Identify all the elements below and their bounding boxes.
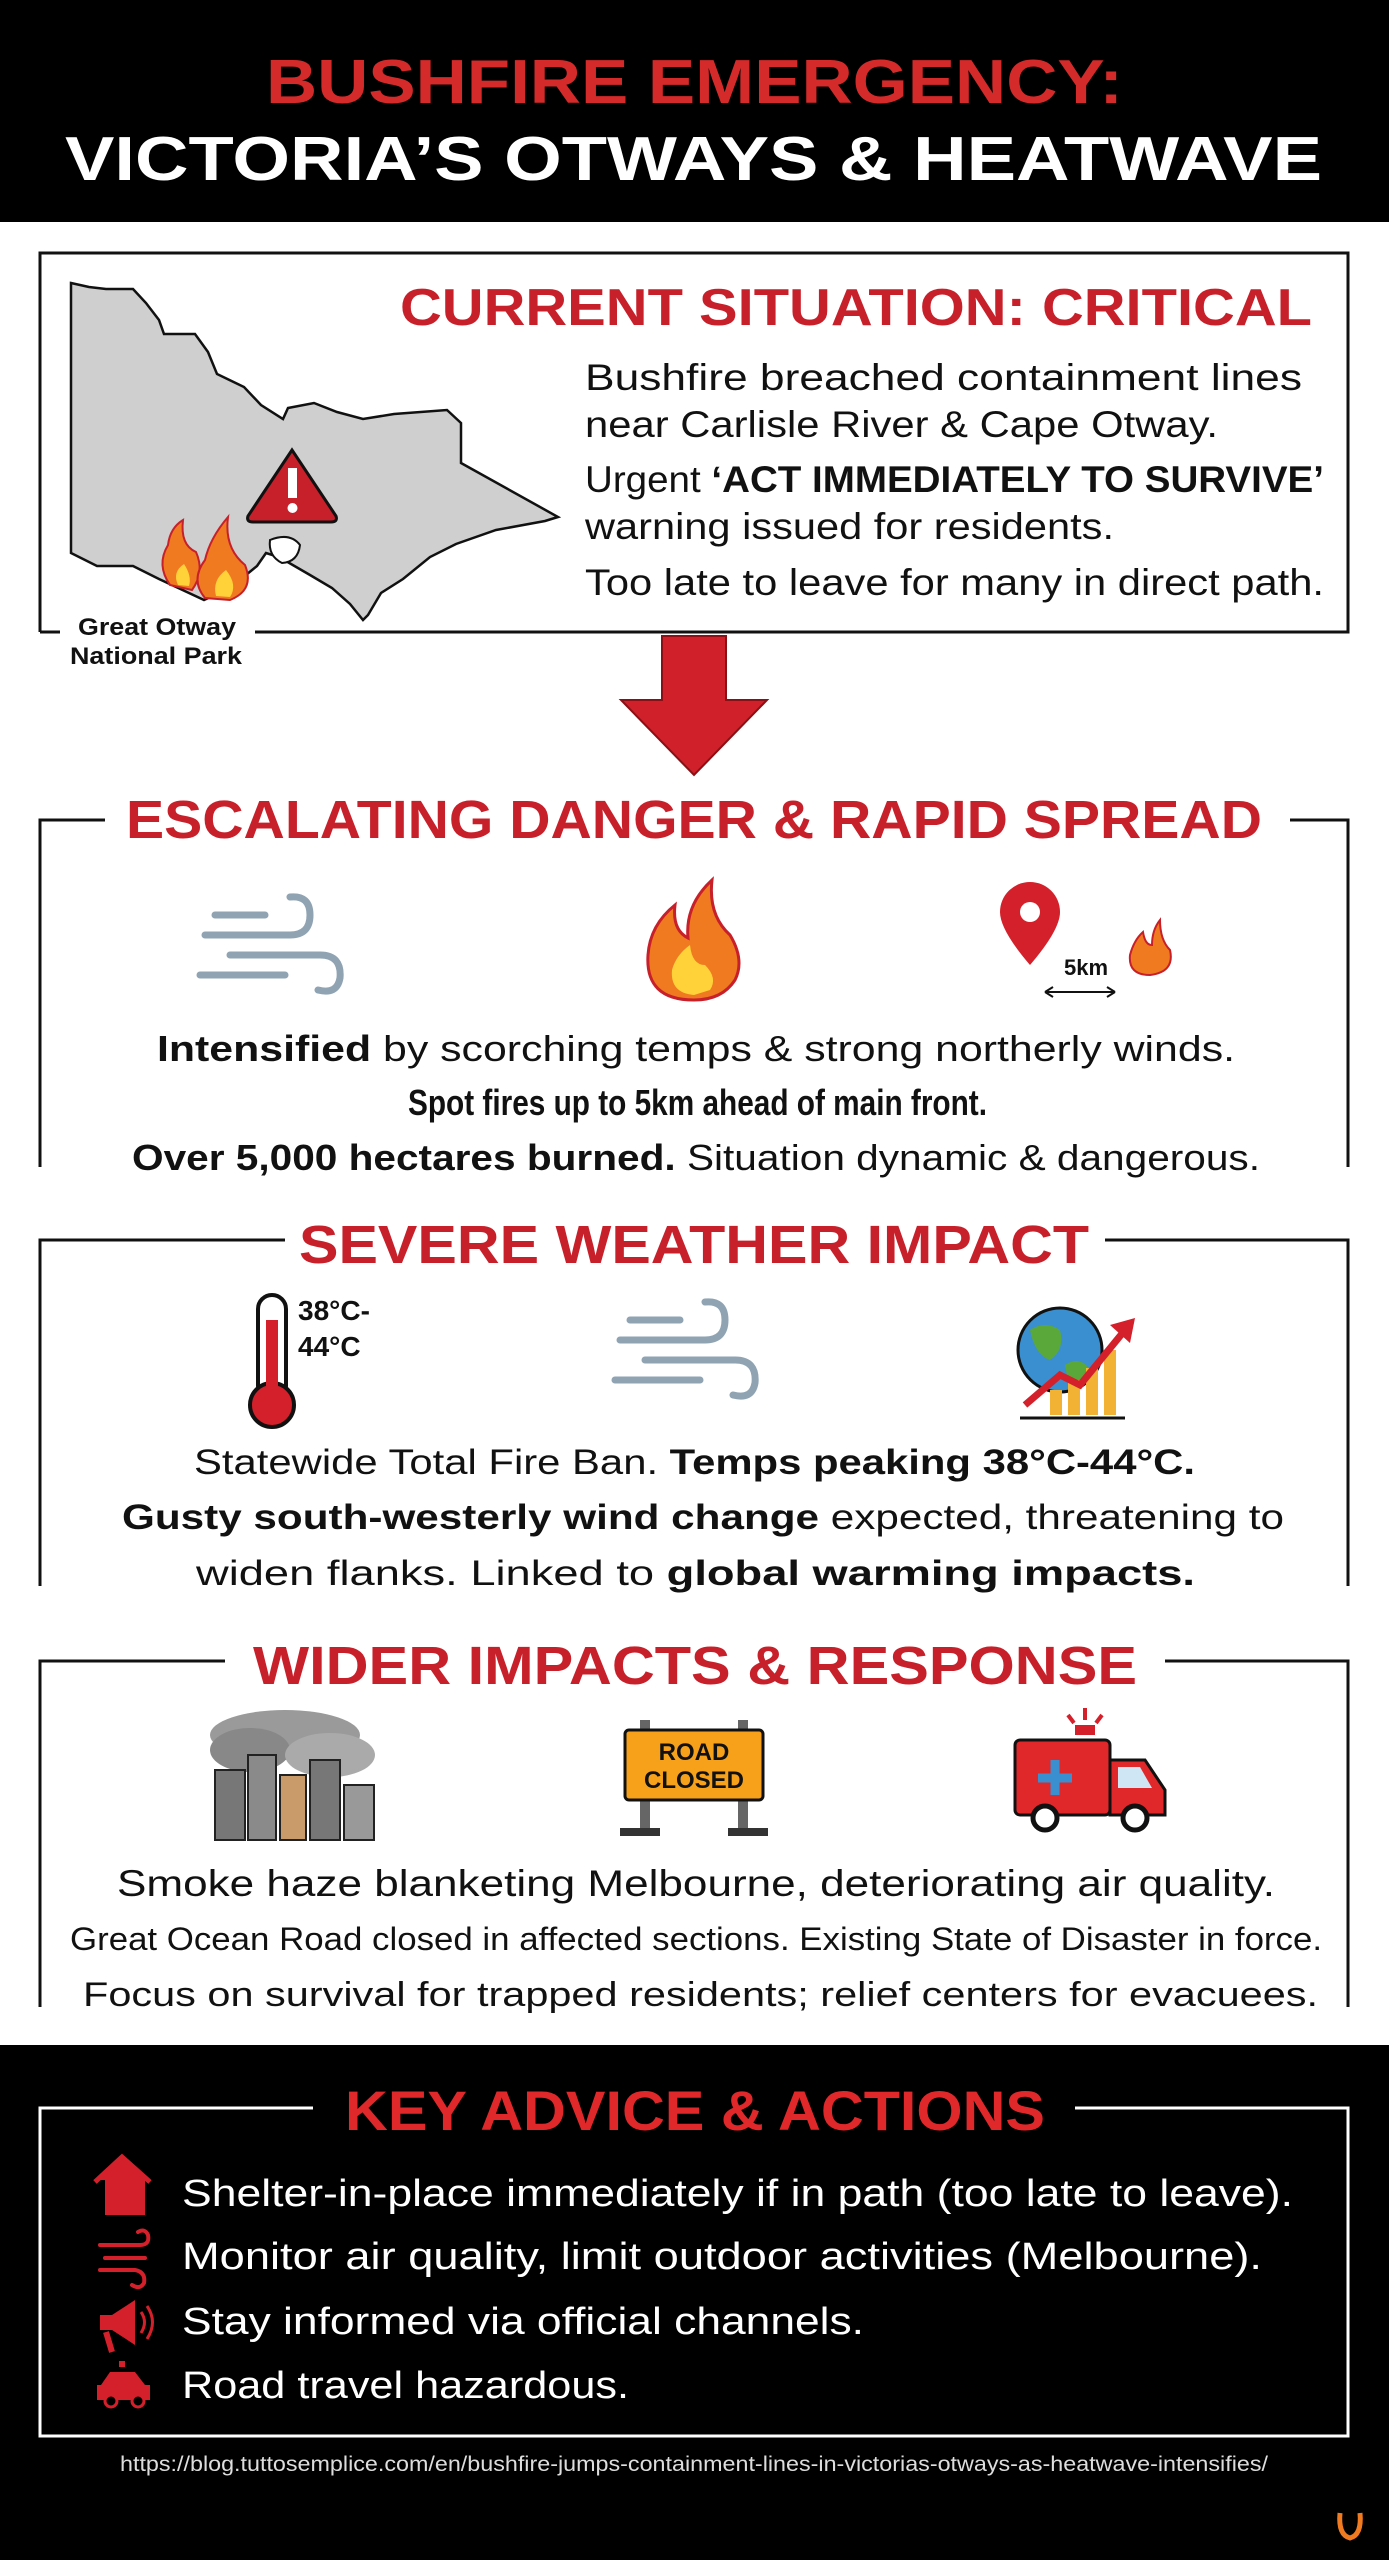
icon: car	[97, 2361, 150, 2407]
icon: thermometer: 44°C	[298, 1331, 361, 1362]
text block: situation	[584, 357, 1324, 603]
panel: escalating danger	[40, 790, 1348, 1178]
title: VICTORIA’S OTWAYS & HEATWAVE	[65, 125, 1322, 194]
icon: house	[95, 2157, 150, 2215]
icon: fire truck	[1015, 1708, 1165, 1830]
heading: severe weather: SEVERE WEATHER IMPACT	[299, 1215, 1089, 1275]
text block: impacts	[70, 1863, 1322, 2014]
icon: thermometer: 38°C-	[298, 1295, 370, 1326]
label: Great Otway National Park: National Park	[70, 643, 243, 670]
icon: location pin 5km	[1000, 882, 1171, 997]
arrow: down	[621, 636, 767, 775]
panel: current situation	[40, 253, 1348, 670]
label: Great Otway National Park: Great Otway	[78, 614, 237, 641]
text block: situation: Urgent ‘ACT IMMEDIATELY TO SURVIVE’	[585, 459, 1324, 500]
text block: impacts: Focus on survival for trapped residents; relief centers for evacuees.	[83, 1976, 1318, 2014]
text block: escalating	[132, 1028, 1260, 1178]
title	[65, 48, 1322, 194]
list: advice items	[182, 2173, 1293, 2407]
icon: wind	[200, 897, 340, 991]
source url: https://blog.tuttosemplice.com/en/bushfire-jumps-containment-lines-in-victorias-otways-as-heatwave-intensifies/	[120, 2453, 1268, 2476]
panel: wider impacts	[40, 1636, 1348, 2014]
panel: key advice	[0, 2045, 1389, 2560]
icon: location pin 5km: 5km	[1064, 955, 1108, 980]
heading: key advice: KEY ADVICE & ACTIONS	[345, 2079, 1045, 2142]
icon: wind	[100, 2231, 148, 2287]
map of Victoria	[71, 283, 558, 620]
heading: escalating: ESCALATING DANGER & RAPID SPREAD	[126, 790, 1262, 850]
icon: megaphone	[100, 2300, 152, 2352]
text block: weather: widen flanks. Linked to global warming impacts.	[195, 1554, 1195, 1593]
text block: weather	[122, 1443, 1284, 1593]
text block: escalating: Spot fires up to 5km ahead of main front.	[408, 1082, 987, 1123]
list: advice items: Stay informed via official channels.	[182, 2301, 864, 2343]
icon: road closed sign	[620, 1720, 768, 1836]
panel: severe weather	[40, 1215, 1348, 1593]
list: advice items: Road travel hazardous.	[182, 2365, 629, 2407]
icon: flame	[648, 880, 739, 1000]
header band	[0, 0, 1389, 222]
logo	[1340, 2513, 1360, 2538]
text block: situation: warning issued for residents.	[584, 506, 1114, 547]
text block: situation: near Carlisle River & Cape Otway.	[585, 404, 1218, 445]
text block: escalating: Intensified by scorching temps & strong northerly winds.	[157, 1028, 1235, 1069]
text block: situation: Bushfire breached containment lines	[585, 357, 1302, 398]
text block: situation: Too late to leave for many in direct path.	[585, 562, 1324, 603]
text block: weather: Statewide Total Fire Ban. Temps peaking 38°C-44°C.	[194, 1443, 1195, 1482]
icon: road closed sign: CLOSED	[644, 1767, 744, 1794]
icon: road closed sign: ROAD	[659, 1739, 729, 1766]
list: advice items: Monitor air quality, limit outdoor activities (Melbourne).	[182, 2236, 1262, 2278]
text block: impacts: Smoke haze blanketing Melbourne, deteriorating air quality.	[117, 1863, 1275, 1904]
list: advice items: Shelter-in-place immediately if in path (too late to leave).	[182, 2173, 1293, 2215]
icon: warning triangle	[248, 450, 336, 522]
text block: escalating: Over 5,000 hectares burned. Situation dynamic & dangerous.	[132, 1137, 1260, 1178]
heading: wider impacts: WIDER IMPACTS & RESPONSE	[253, 1636, 1137, 1696]
icon: globe chart	[1018, 1308, 1135, 1418]
icon: smoky city	[210, 1710, 375, 1840]
icon: wind	[615, 1302, 755, 1396]
icon: thermometer	[250, 1295, 370, 1427]
text block: weather: Gusty south-westerly wind change expected, threatening to	[122, 1498, 1284, 1537]
heading: current situation: CURRENT SITUATION: CRITICAL	[400, 279, 1312, 337]
icon: fires	[162, 517, 248, 600]
text block: impacts: Great Ocean Road closed in affected sections. Existing State of Disaster in force.	[70, 1921, 1322, 1957]
title: BUSHFIRE EMERGENCY:	[266, 48, 1123, 117]
label: Great Otway National Park	[70, 614, 243, 670]
